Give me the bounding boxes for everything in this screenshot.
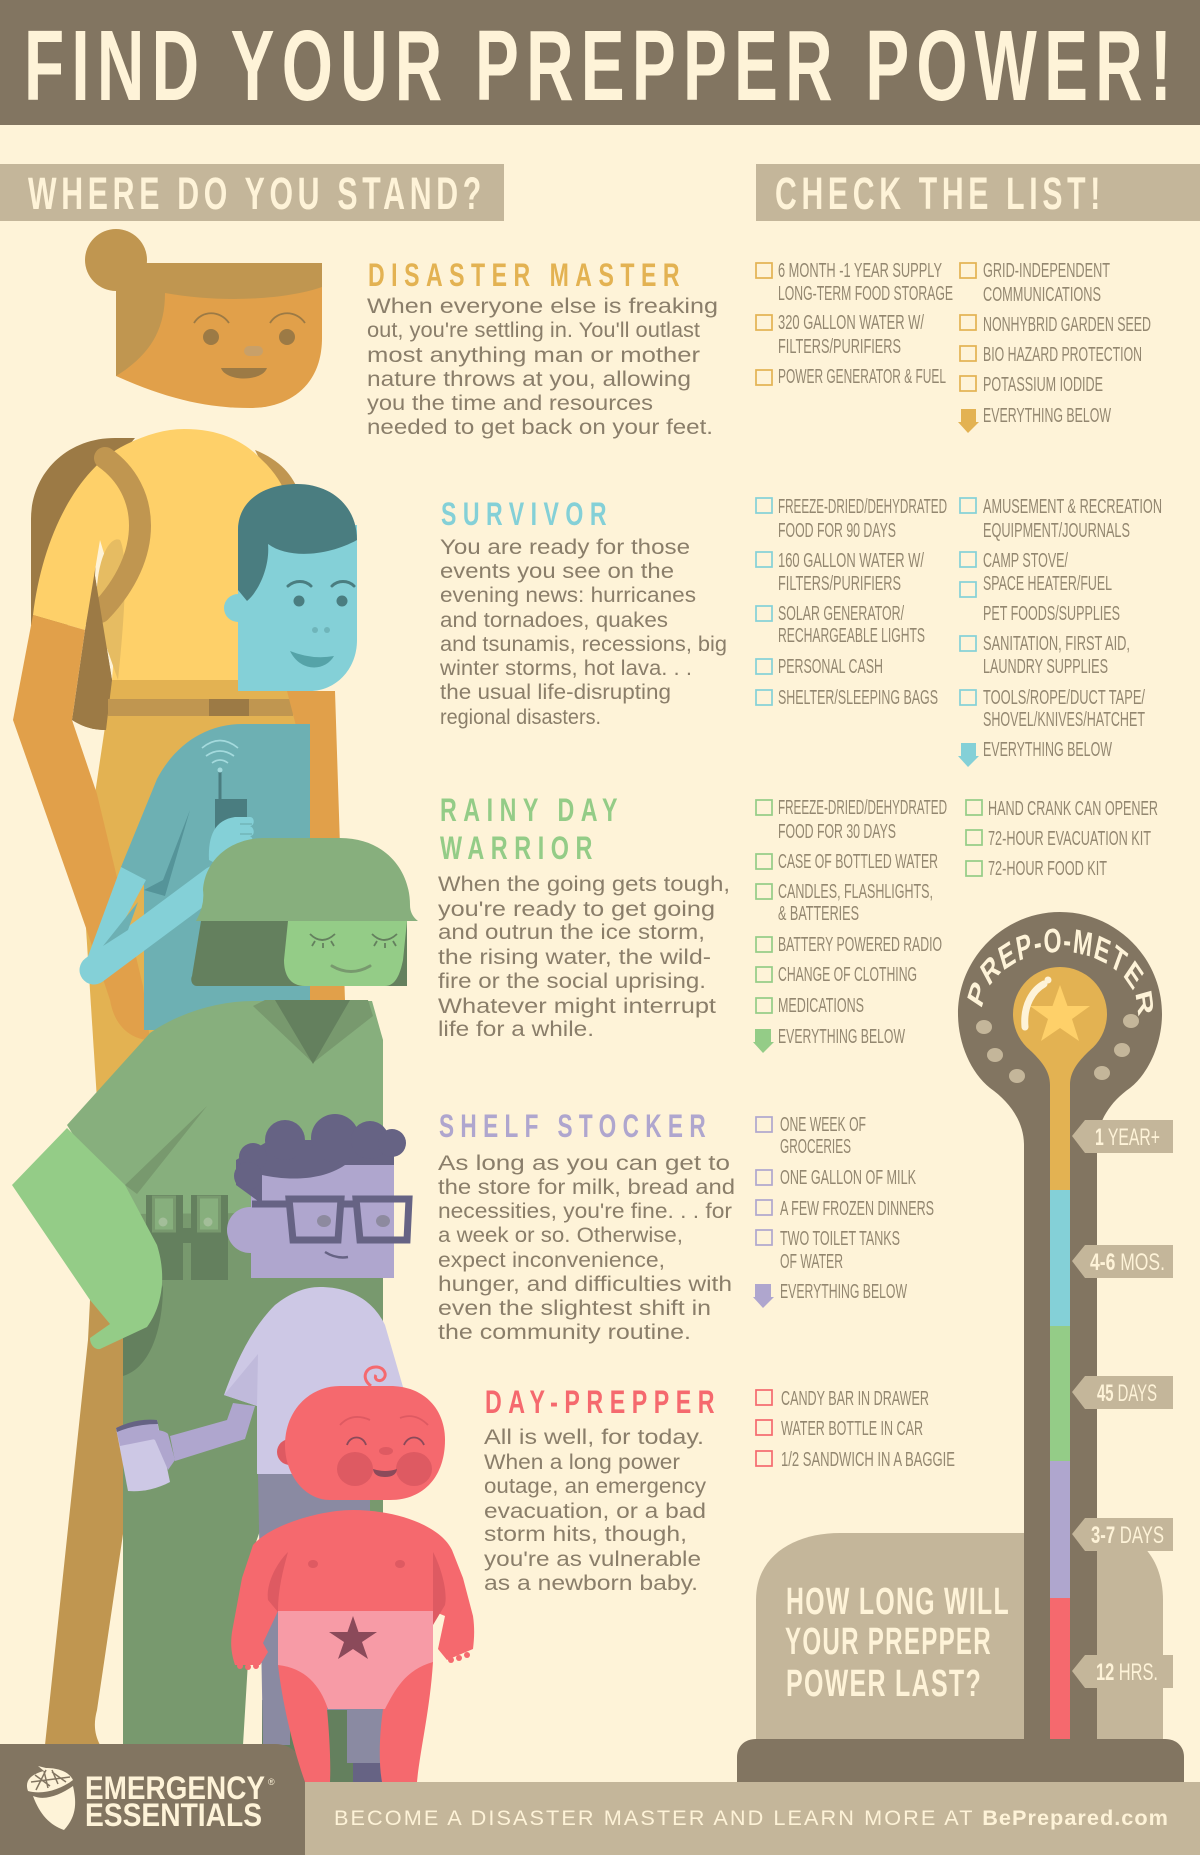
section text: survivor: regional disasters. <box>440 705 601 729</box>
section text: survivor: evening news: hurricanes <box>440 583 696 607</box>
checklist: day-prepper: 1/2 SANDWICH IN A BAGGIE <box>781 1449 955 1471</box>
footer bar: BECOME A DISASTER MASTER AND LEARN MORE AT BePrepared.com <box>334 1807 1169 1830</box>
section text: shelf stocker: SHELF STOCKER <box>439 1108 712 1144</box>
section text: rainy day warrior: WARRIOR <box>440 830 599 866</box>
section text: day-prepper: evacuation, or a bad <box>484 1499 706 1523</box>
section text: shelf stocker: even the slightest shift in <box>438 1296 711 1320</box>
checklist: shelf stocker: OF WATER <box>780 1251 843 1273</box>
checklist: day-prepper: WATER BOTTLE IN CAR <box>781 1418 923 1440</box>
meter title curved text: PREP-O-METER <box>967 928 1153 1016</box>
section text: shelf stocker: hunger, and difficulties with <box>438 1272 732 1296</box>
checklist: rainy day warrior: EVERYTHING BELOW <box>778 1026 905 1048</box>
checklist: shelf stocker: ONE WEEK OF <box>780 1114 866 1136</box>
checklist: survivor: 160 GALLON WATER W/ <box>778 550 924 572</box>
checklist: rainy day warrior: FOOD FOR 30 DAYS <box>778 821 896 843</box>
checklist: disaster master <box>756 260 1151 433</box>
star <box>329 1616 377 1659</box>
section text: shelf stocker: a week or so. Otherwise, <box>438 1223 683 1247</box>
section text: day-prepper: as a newborn baby. <box>484 1571 698 1595</box>
section text: rainy day warrior: RAINY DAY <box>440 792 624 828</box>
checklist: survivor: PERSONAL CASH <box>778 656 883 678</box>
footer bar <box>300 1782 1200 1855</box>
tag: 4-6 months: 4-6 MOS. <box>1090 1249 1165 1276</box>
logo panel: ® <box>268 1777 275 1787</box>
character: disaster master body <box>13 429 345 1745</box>
checklist: survivor <box>756 496 1162 767</box>
checklist: rainy day warrior: MEDICATIONS <box>778 995 864 1017</box>
section text: shelf stocker: the store for milk, bread and <box>438 1175 735 1199</box>
section text: rainy day warrior: Whatever might interrupt <box>438 994 716 1018</box>
character: day-prepper baby <box>231 1367 474 1782</box>
checklist: survivor: FREEZE-DRIED/DEHYDRATED <box>778 496 947 518</box>
section text: shelf stocker: necessities, you're fine. . . for <box>438 1199 732 1223</box>
heading: where do you stand <box>0 164 504 221</box>
section text: shelf stocker: expect inconvenience, <box>438 1248 665 1272</box>
tombstone panel <box>756 1533 1163 1739</box>
character: rainy day warrior head <box>191 838 418 986</box>
checklist: shelf stocker: ONE GALLON OF MILK <box>780 1167 916 1189</box>
section text: rainy day warrior: life for a while. <box>438 1017 594 1041</box>
icon: can <box>116 1420 175 1491</box>
tombstone panel: YOUR PREPPER <box>785 1621 992 1663</box>
checklist: shelf stocker: TWO TOILET TANKS <box>780 1228 900 1250</box>
heading: where do you stand: WHERE DO YOU STAND? <box>28 168 486 219</box>
icon: binoculars <box>130 1195 228 1280</box>
section text: disaster master: most anything man or mother <box>367 343 700 367</box>
checklist: survivor: SHELTER/SLEEPING BAGS <box>778 687 938 709</box>
checklist: disaster master: COMMUNICATIONS <box>983 284 1101 306</box>
section text: survivor: winter storms, hot lava. . . <box>439 656 692 680</box>
section text: disaster master: When everyone else is freaking <box>367 294 718 318</box>
checklist: disaster master: FILTERS/PURIFIERS <box>778 336 901 358</box>
section text: disaster master <box>367 257 718 439</box>
checklist: rainy day warrior <box>753 797 1158 1053</box>
prep-o-meter <box>737 912 1184 1782</box>
checklist: disaster master: 6 MONTH -1 YEAR SUPPLY <box>778 260 942 282</box>
tag: 45 days: 45 DAYS <box>1097 1380 1157 1407</box>
checklist: day-prepper <box>756 1388 955 1471</box>
checklist: disaster master: 320 GALLON WATER W/ <box>778 312 924 334</box>
checklist: survivor: SPACE HEATER/FUEL <box>983 573 1112 595</box>
tombstone panel: POWER LAST? <box>786 1663 982 1705</box>
checklist: shelf stocker: EVERYTHING BELOW <box>780 1281 907 1303</box>
section text: day-prepper: outage, an emergency <box>484 1474 706 1498</box>
section text: disaster master: out, you're settling in. You'll outlast <box>367 318 700 342</box>
tag: 1 year: 1 YEAR+ <box>1095 1124 1160 1151</box>
checklist: rainy day warrior: BATTERY POWERED RADIO <box>778 934 942 956</box>
character: rainy day warrior body <box>12 1000 383 1745</box>
thermometer bulb and stem <box>1013 967 1107 1739</box>
checklist: disaster master: POTASSIUM IODIDE <box>983 374 1103 396</box>
checklist: rainy day warrior: FREEZE-DRIED/DEHYDRATED <box>778 797 947 819</box>
section text: shelf stocker <box>438 1108 735 1344</box>
logo panel: EMERGENCY <box>85 1770 265 1806</box>
section text: day-prepper: storm hits, though, <box>484 1522 687 1546</box>
tag: 45 days <box>1072 1376 1173 1409</box>
head <box>277 1439 303 1465</box>
checklist: disaster master: EVERYTHING BELOW <box>983 405 1111 427</box>
section text: disaster master: you the time and resources <box>367 391 653 415</box>
section text: survivor: You are ready for those <box>440 535 690 559</box>
diaper <box>278 1611 433 1709</box>
section text: shelf stocker: the community routine. <box>438 1320 691 1344</box>
checklist: rainy day warrior: CANDLES, FLASHLIGHTS, <box>778 881 933 903</box>
icon: walkie talkie <box>202 740 247 830</box>
checklist: survivor: FOOD FOR 90 DAYS <box>778 520 896 542</box>
tag: 4-6 months <box>1072 1245 1173 1278</box>
section text: survivor: events you see on the <box>440 559 674 583</box>
checklist: survivor: CAMP STOVE/ <box>983 550 1068 572</box>
logo panel <box>0 1744 305 1855</box>
section text: survivor: SURVIVOR <box>441 496 613 532</box>
meter base <box>737 1739 1184 1783</box>
checklist: disaster master: GRID-INDEPENDENT <box>983 260 1110 282</box>
section text: rainy day warrior: fire or the social uprising. <box>438 969 706 993</box>
checklist: shelf stocker <box>753 1114 934 1308</box>
checklist: rainy day warrior: 72-HOUR FOOD KIT <box>988 858 1107 880</box>
checklist: survivor: SOLAR GENERATOR/ <box>778 603 904 625</box>
character: disaster master head <box>85 229 322 408</box>
meter body <box>958 912 1162 1740</box>
section text: day-prepper: When a long power <box>484 1450 680 1474</box>
section text: day-prepper: you're as vulnerable <box>484 1547 701 1571</box>
section text: disaster master: needed to get back on your feet. <box>367 415 713 439</box>
checklist: survivor: EVERYTHING BELOW <box>983 739 1112 761</box>
tag: 12 hours: 12 HRS. <box>1096 1659 1158 1686</box>
section text: disaster master: DISASTER MASTER <box>368 257 686 293</box>
tag: 3-7 days: 3-7 DAYS <box>1091 1522 1164 1549</box>
dots <box>976 1014 1139 1083</box>
tag: 1 year <box>1072 1120 1173 1153</box>
section text: day-prepper: All is well, for today. <box>484 1425 704 1449</box>
icon: acorn <box>27 1766 75 1830</box>
checklist: shelf stocker: GROCERIES <box>780 1136 851 1158</box>
checklist: disaster master: LONG-TERM FOOD STORAGE <box>778 283 953 305</box>
tag: 3-7 days <box>1072 1518 1173 1551</box>
section text: rainy day warrior: and outrun the ice storm, <box>438 920 705 944</box>
checklist: shelf stocker: A FEW FROZEN DINNERS <box>780 1198 934 1220</box>
section text: day-prepper <box>484 1384 721 1595</box>
checklist: survivor: FILTERS/PURIFIERS <box>778 573 901 595</box>
checklist: survivor: RECHARGEABLE LIGHTS <box>778 625 925 647</box>
section text: shelf stocker: As long as you can get to <box>438 1151 730 1175</box>
section text: disaster master: nature throws at you, allowing <box>367 367 691 391</box>
checklist: rainy day warrior: CHANGE OF CLOTHING <box>778 964 917 986</box>
section text: survivor: and tornadoes, quakes <box>440 608 668 632</box>
section text: rainy day warrior: the rising water, the wild- <box>438 945 711 969</box>
tombstone panel: HOW LONG WILL <box>786 1581 1010 1623</box>
checklist: day-prepper: CANDY BAR IN DRAWER <box>781 1388 929 1410</box>
section text: survivor <box>439 496 727 729</box>
tag: 12 hours <box>1072 1655 1173 1688</box>
checklist: survivor: PET FOODS/SUPPLIES <box>983 603 1120 625</box>
checklist: disaster master: POWER GENERATOR & FUEL <box>778 366 946 388</box>
section text: survivor: and tsunamis, recessions, big <box>440 632 727 656</box>
checklist: rainy day warrior: CASE OF BOTTLED WATER <box>778 851 938 873</box>
section text: rainy day warrior: you're ready to get going <box>438 897 715 921</box>
section text: rainy day warrior: When the going gets tough, <box>438 872 730 896</box>
character: shelf stocker <box>116 1114 415 1782</box>
checklist: survivor: LAUNDRY SUPPLIES <box>983 656 1108 678</box>
character: survivor <box>84 484 357 1030</box>
logo panel: ESSENTIALS <box>85 1797 262 1833</box>
checklist: rainy day warrior: & BATTERIES <box>778 903 859 925</box>
section text: survivor: the usual life-disrupting <box>440 680 671 704</box>
section text: rainy day warrior <box>438 792 730 1041</box>
section text: day-prepper: DAY-PREPPER <box>485 1384 721 1420</box>
